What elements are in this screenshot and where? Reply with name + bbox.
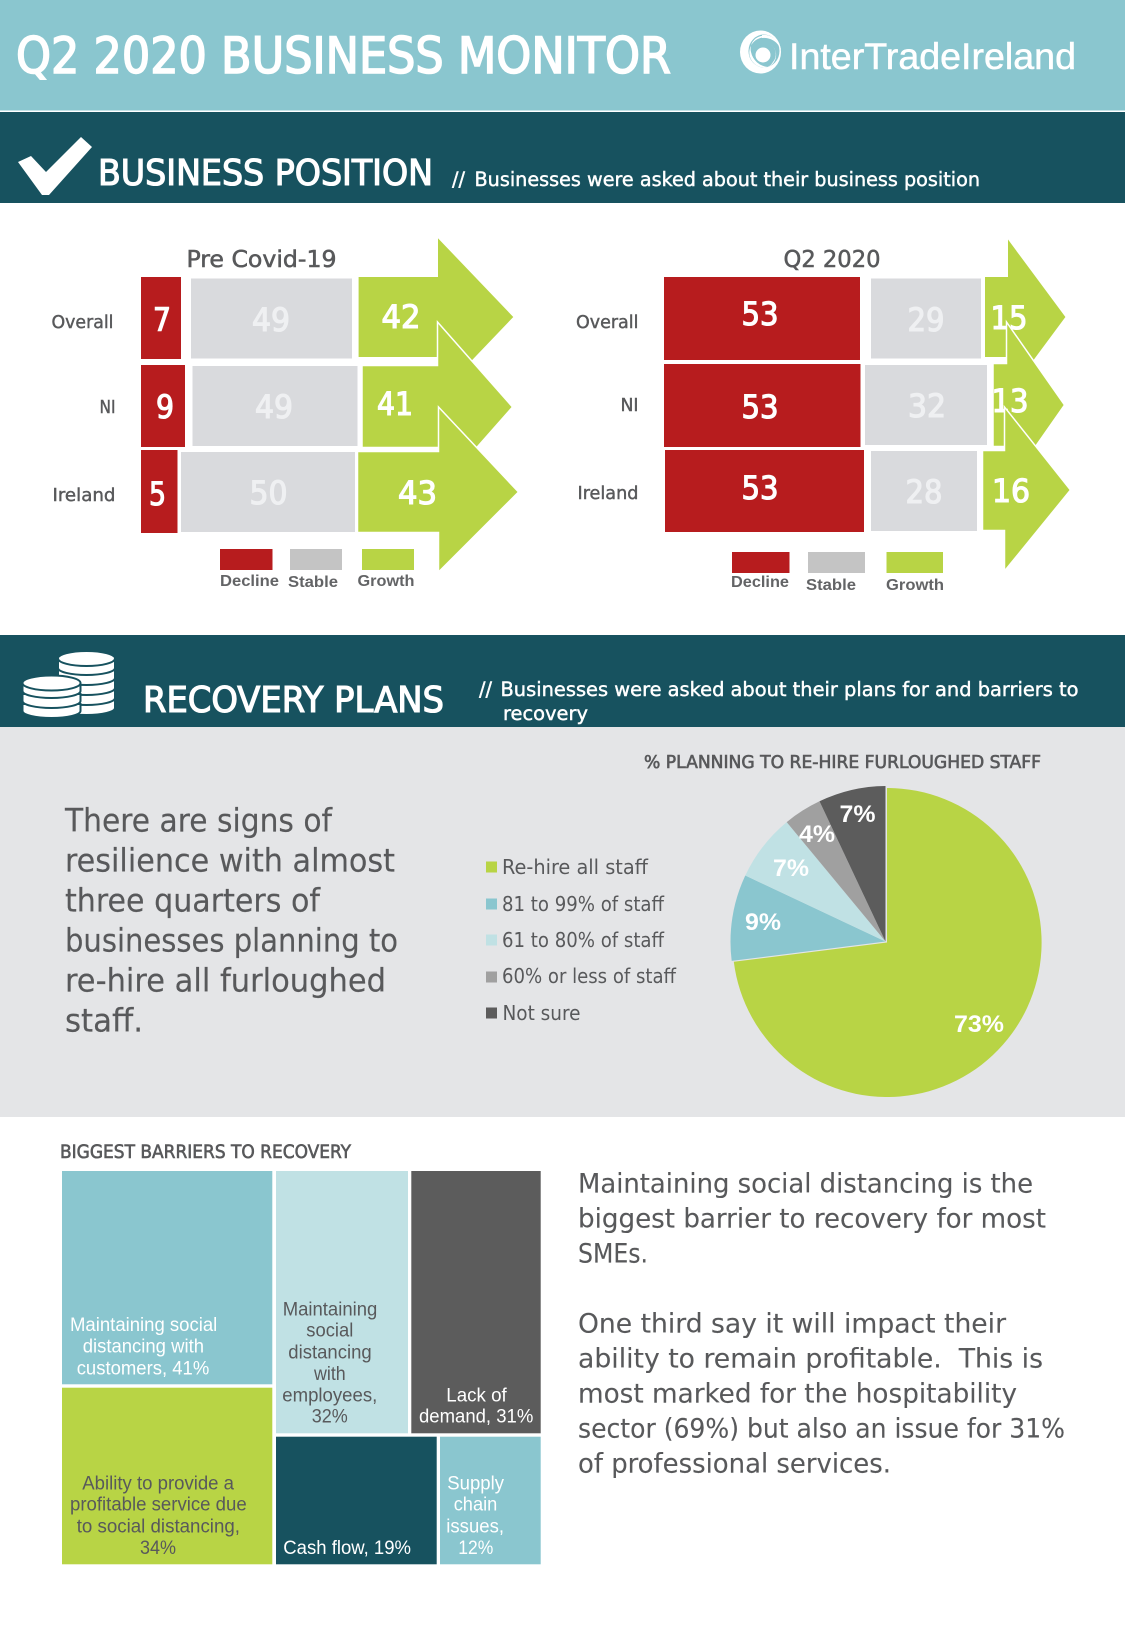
tile: supply chain: 12% [458, 1538, 493, 1559]
legend: Q2 2020: Growth [886, 577, 944, 594]
tile: supply chain: Supply [447, 1473, 504, 1494]
text block: profitability: One third say it will impact their [578, 1308, 1006, 1339]
text block: profitability: ability to remain profitable. This is [578, 1343, 1043, 1374]
text block: resilience: three quarters of [65, 882, 321, 920]
text block: resilience: resilience with almost [65, 842, 395, 880]
row: Ireland: 43 [398, 474, 437, 512]
text block: resilience [64, 802, 398, 1040]
text block: social distancing [578, 1168, 1046, 1269]
row: Ireland: 53 [742, 469, 778, 507]
row: Ireland: 28 [906, 473, 942, 511]
subheading: recovery plans [479, 678, 1078, 725]
legend: re-hire: 60% or less of staff [502, 964, 677, 988]
title: Q2 2020 BUSINESS MONITOR [16, 27, 671, 85]
tile: lack of demand: demand, 31% [419, 1407, 533, 1428]
chart: Q2 2020 business position [576, 238, 1070, 594]
section header: recovery plans [0, 635, 1125, 727]
row: Ireland [578, 407, 1070, 571]
tile: cash flow: Cash flow, 19% [283, 1538, 411, 1559]
logo: InterTradeIreland: InterTradeIreland [789, 36, 1076, 77]
row: NI: NI [620, 395, 638, 416]
icon: check mark [18, 137, 92, 195]
tile: profitable service [62, 1388, 272, 1564]
tile: lack of demand: Lack of [446, 1386, 507, 1407]
legend: re-hire: 81 to 99% of staff [502, 892, 665, 916]
row: overall: Overall [52, 312, 114, 333]
row: overall: 53 [742, 295, 778, 333]
row: NI [100, 322, 512, 492]
text block: profitability: sector (69%) but also an issue for 31% [578, 1413, 1065, 1444]
pie chart: re-hire: 7% [773, 855, 809, 882]
row: overall: 49 [252, 301, 290, 339]
legend: re-hire: Re-hire all staff [502, 855, 649, 879]
tile: employees: employees, [282, 1386, 377, 1407]
row: NI: NI [100, 397, 116, 418]
row: NI: 32 [908, 387, 946, 425]
text block: profitability [578, 1308, 1065, 1479]
chart title: pre Covid-19: Pre Covid-19 [186, 247, 336, 273]
tile: customers: Maintaining social [70, 1315, 217, 1336]
row: overall: 15 [990, 299, 1028, 337]
pie chart: re-hire: 4% [799, 821, 835, 848]
legend: pre Covid-19: Stable [288, 574, 338, 591]
legend: re-hire: 61 to 80% of staff [502, 928, 665, 952]
legend: pre Covid-19: Growth [358, 573, 414, 590]
legend: pre Covid-19: Decline [220, 573, 279, 590]
legend: re-hire: Not sure [502, 1001, 580, 1025]
subheading: recovery plans: Businesses were asked about their plans for and barriers to [500, 678, 1078, 701]
tile: customers: distancing with [83, 1337, 204, 1358]
row: Ireland: 5 [149, 475, 166, 513]
legend: Q2 2020 [731, 552, 944, 594]
tile: customers: customers, 41% [77, 1358, 209, 1379]
row: NI: 53 [742, 388, 778, 426]
treemap: biggest barriers [62, 1171, 541, 1564]
tile: profitable service: profitable service due [70, 1495, 247, 1516]
chart title: re-hire: % PLANNING TO RE-HIRE FURLOUGHED STAFF [644, 753, 1041, 773]
text block: profitability: of professional services. [578, 1448, 891, 1479]
row: NI: 9 [156, 388, 174, 426]
text block: social distancing: SMEs. [578, 1238, 648, 1269]
text block: resilience: re-hire all furloughed [65, 962, 386, 1000]
row: overall: 29 [908, 301, 944, 339]
tile: employees: with [313, 1364, 346, 1385]
text block: resilience: staff. [65, 1002, 143, 1040]
chart title: biggest barriers: BIGGEST BARRIERS TO RECOVERY [60, 1141, 352, 1163]
heading: recovery plans: RECOVERY PLANS [143, 680, 444, 721]
pie chart: re-hire: 7% [840, 801, 876, 828]
tile: supply chain: issues, [446, 1517, 504, 1538]
tile: employees: distancing [288, 1343, 372, 1364]
tile: employees: 32% [312, 1407, 348, 1428]
tile: supply chain [440, 1437, 541, 1564]
row: overall [576, 238, 1066, 396]
tile: employees [276, 1171, 408, 1433]
tile: employees: Maintaining [283, 1299, 377, 1320]
legend: pre Covid-19 [220, 549, 414, 591]
tile: employees: social [306, 1321, 353, 1342]
row: Ireland: 50 [250, 474, 288, 512]
icon: coin stacks [22, 651, 115, 718]
chart title: Q2 2020: Q2 2020 [784, 247, 880, 273]
row: NI [620, 322, 1064, 488]
text block: social distancing: biggest barrier to recovery for most [578, 1203, 1046, 1234]
legend: Q2 2020: Stable [806, 577, 856, 594]
tile: profitable service: to social distancing, [77, 1517, 240, 1538]
tile: profitable service: 34% [140, 1538, 176, 1559]
pie chart: re-hire: 73% [954, 1011, 1004, 1038]
header banner [0, 0, 1125, 110]
legend: Q2 2020: Decline [731, 574, 789, 591]
tile: lack of demand [411, 1171, 541, 1433]
tile: customers [62, 1171, 272, 1384]
row: Ireland: 16 [992, 472, 1030, 510]
row: Ireland: Ireland [578, 483, 638, 504]
text block: profitability: most marked for the hospitability [578, 1378, 1017, 1409]
tile: supply chain: chain [454, 1495, 497, 1516]
pie chart: re-hire [730, 786, 1042, 1097]
subheading: business position: // [452, 168, 465, 191]
text block: resilience: There are signs of [64, 802, 333, 840]
chart: pre Covid-19 business position [52, 237, 518, 591]
tile: cash flow [276, 1437, 437, 1564]
subheading: recovery plans: recovery [503, 702, 588, 725]
subheading: business position: Businesses were asked about their business position [474, 168, 980, 191]
text block: resilience: businesses planning to [65, 922, 398, 960]
row: NI: 49 [255, 388, 293, 426]
row: overall: Overall [576, 312, 638, 333]
row: Ireland: Ireland [52, 485, 116, 506]
row: overall [52, 237, 514, 397]
section header: business position [0, 112, 1125, 203]
subheading: recovery plans: // [479, 678, 492, 701]
panel: re-hire plans [0, 727, 1125, 1117]
row: NI: 41 [377, 385, 413, 423]
row: overall: 7 [153, 301, 171, 339]
pie chart: re-hire: 9% [745, 909, 781, 936]
tile: profitable service: Ability to provide a [82, 1473, 234, 1494]
heading: business position: BUSINESS POSITION [98, 153, 433, 194]
row: Ireland [52, 407, 518, 572]
row: overall: 42 [382, 298, 420, 336]
legend: re-hire [486, 855, 677, 1025]
text block: social distancing: Maintaining social distancing is the [578, 1168, 1033, 1199]
row: NI: 13 [992, 382, 1028, 420]
